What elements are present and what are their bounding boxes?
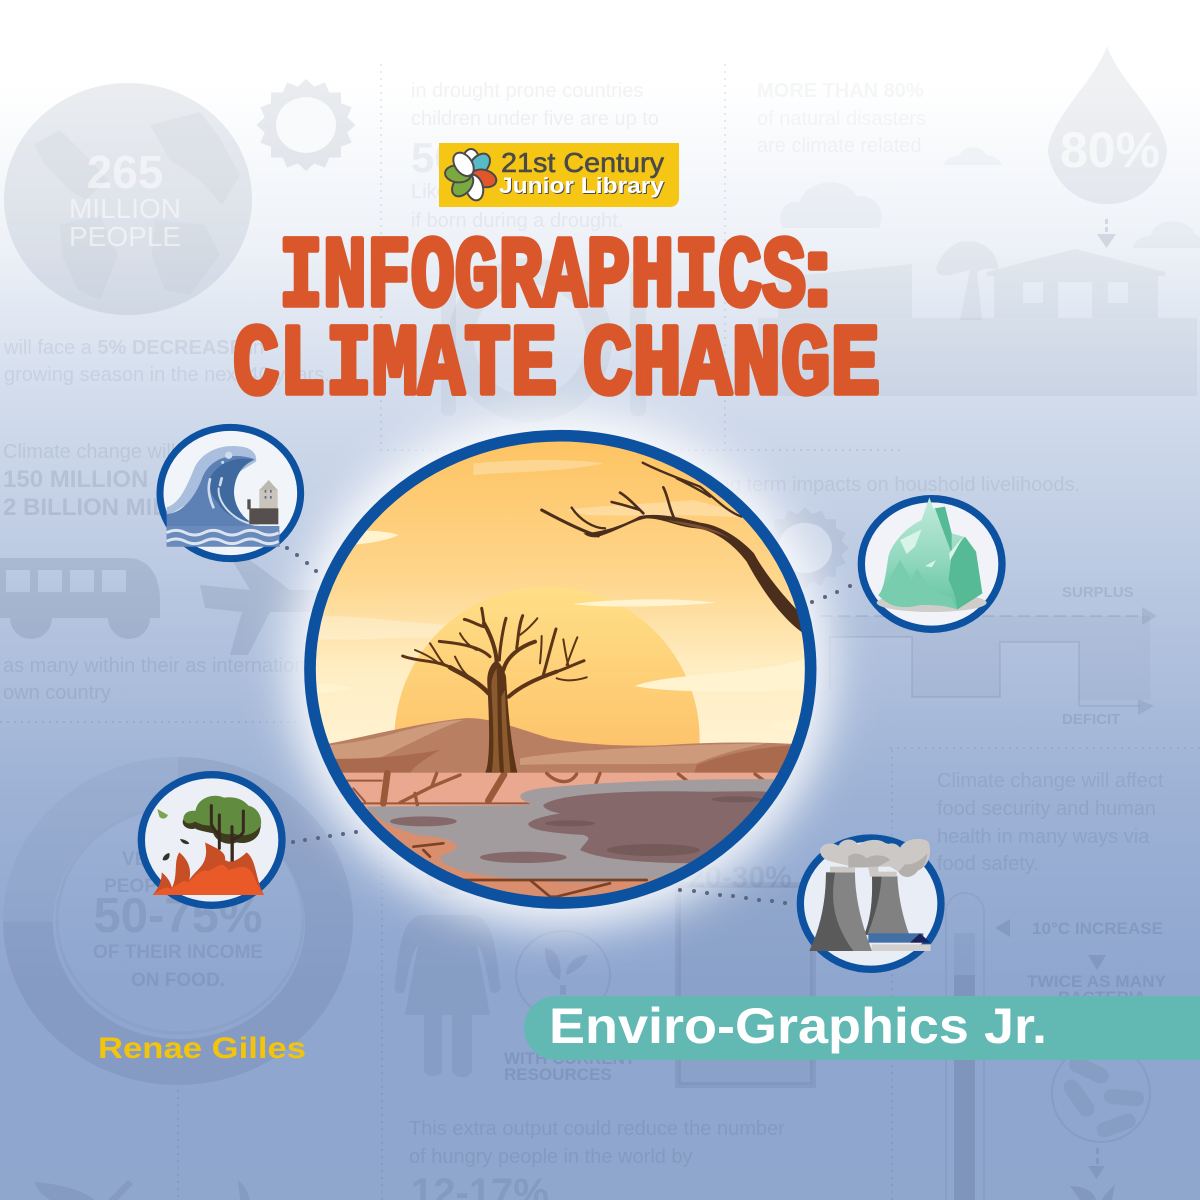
title line 1: : — [801, 215, 834, 327]
surplus deficit chart: DEFICIT — [1062, 711, 1120, 728]
wave inner shade — [208, 459, 254, 522]
globe: 265 million people: 265 — [87, 146, 163, 198]
dead tree — [403, 608, 587, 773]
iceberg facets — [900, 529, 963, 567]
food security text — [937, 770, 1164, 875]
icon: tsunami wave — [160, 427, 301, 559]
donut chart income on food: PEOPLE SPEND — [104, 876, 252, 897]
lower ground base — [367, 809, 660, 898]
icon: power plant — [800, 838, 941, 969]
big foreground branch — [542, 463, 807, 633]
sun icon — [257, 79, 355, 171]
blue ring — [310, 436, 811, 903]
iceberg shadow — [877, 593, 987, 612]
food security text: food security and human — [937, 798, 1156, 820]
dashed arrow from drop — [1097, 219, 1116, 248]
growing season text — [3, 337, 330, 386]
scene artwork — [310, 430, 810, 913]
darker mud pools — [545, 796, 762, 856]
tree canopy shadow — [183, 798, 261, 844]
iceberg circle frame — [861, 499, 1002, 629]
livelihoods text: long term impacts on houshold livelihoods. — [703, 474, 1080, 496]
resources label: WITH CURRENT — [504, 1049, 636, 1068]
logo text: 21st Century: 21st Century — [501, 147, 664, 178]
migration text: 150 MILLION — [3, 466, 148, 493]
migration text: Climate change will — [3, 441, 175, 463]
bottom leaves — [35, 1180, 250, 1200]
series banner — [524, 996, 1200, 1060]
cracked ground — [342, 772, 778, 810]
main drought scene — [310, 430, 811, 913]
author name: Renae Gilles — [98, 1032, 306, 1065]
drought text block: children under five are up to — [411, 108, 659, 130]
white glow behind scene — [288, 412, 832, 928]
migration caption: own country — [3, 682, 111, 704]
title line 1: INFOGRAPHICS — [279, 223, 806, 336]
temperature labels: TWICE AS MANY — [1027, 972, 1167, 991]
icon: iceberg — [861, 497, 1002, 629]
logo yellow plate — [439, 143, 679, 207]
thermometer — [946, 893, 984, 1200]
wave crest back — [167, 446, 256, 517]
growing season text: growing season in the next 40 years. — [4, 364, 330, 386]
publisher logo — [439, 143, 679, 207]
title line 2: CLIMATE — [233, 311, 557, 424]
lighter hill faces — [310, 720, 767, 765]
dark mud pools — [390, 791, 773, 863]
wave highlights — [209, 453, 257, 525]
natural disasters text block: of natural disasters — [757, 108, 926, 130]
water drop 80% — [1048, 46, 1167, 204]
title line 2 — [233, 311, 880, 424]
natural disasters text block — [757, 80, 926, 157]
icon: forest fire — [141, 775, 282, 905]
dashed arrow and sprout — [1070, 1148, 1115, 1200]
donut chart income on food: 50-75% — [94, 889, 262, 943]
flying leaves — [157, 809, 189, 860]
drought text block — [411, 80, 659, 232]
surplus deficit chart — [820, 584, 1157, 728]
drought text block: Likely to be malnourished — [411, 181, 638, 203]
logo flower — [444, 149, 498, 202]
wave circle frame — [160, 427, 301, 559]
donut chart income on food: OF THEIR INCOME — [93, 942, 263, 963]
smoke — [820, 839, 930, 877]
banner shape — [524, 996, 1200, 1060]
phone frame with 20-30%: 20-30% — [688, 861, 792, 894]
donut chart income on food: VERY POOR — [122, 849, 234, 870]
hunger text: This extra output could reduce the number — [409, 1118, 785, 1140]
tree canopy — [183, 796, 261, 835]
hunger text — [409, 1118, 785, 1200]
migration text: 2 BILLION MILES — [3, 494, 199, 521]
temperature labels — [995, 919, 1167, 1007]
water drop 80%: 80% — [1060, 122, 1160, 178]
resources label: RESOURCES — [504, 1065, 612, 1084]
natural disasters text block: are climate related — [757, 135, 922, 157]
globe: 265 million people — [4, 83, 252, 315]
wave body — [167, 456, 280, 547]
donut chart income on food: ON FOOD. — [131, 970, 225, 991]
resources label — [504, 1049, 636, 1084]
sky clouds front — [316, 530, 804, 691]
cooling tower back — [864, 876, 909, 935]
globe: 265 million people: PEOPLE — [69, 221, 181, 252]
plate and cutlery icon — [441, 258, 646, 422]
logo text shadow: Junior Library — [500, 174, 666, 199]
far hills — [329, 718, 792, 773]
growing season text: will face a 5% DECREASE in — [3, 337, 264, 359]
temperature labels: BACTERIA — [1058, 988, 1146, 1007]
clouds — [780, 148, 1200, 248]
iceberg lower facets — [878, 560, 957, 609]
back flames — [153, 842, 264, 895]
natural disasters text block: MORE THAN 80% — [757, 80, 924, 102]
sun icon 2 — [761, 507, 849, 589]
hunger text: of hungry people in the world by — [409, 1146, 693, 1168]
puddle of mud — [367, 779, 810, 883]
title — [233, 215, 880, 424]
globe: 265 million people: MILLION — [69, 193, 181, 224]
connector dots: wave — [285, 546, 318, 573]
food security text: Climate change will affect — [937, 770, 1164, 792]
seaside building — [247, 480, 278, 524]
drought text block: if born during a drought. — [411, 210, 623, 232]
title line 2: CHANGE — [583, 311, 880, 424]
sun disc — [394, 587, 700, 746]
migration text — [3, 441, 199, 521]
food security text: health in many ways via — [937, 826, 1150, 848]
migration caption — [3, 655, 321, 704]
front flames — [153, 865, 264, 895]
dark hill bands — [336, 746, 790, 772]
migration caption: as many within their as international — [3, 655, 321, 677]
water waves — [167, 526, 279, 547]
bacteria circle — [1052, 1044, 1150, 1142]
lower ground cracks — [413, 843, 647, 897]
connector dots: factory — [678, 888, 787, 905]
plane icon — [200, 560, 320, 655]
sky clouds back — [313, 460, 747, 640]
flooded houses and palm tree — [775, 241, 1165, 320]
blue building — [868, 933, 931, 951]
drought text block: in drought prone countries — [411, 80, 643, 102]
food security text: food safety. — [937, 853, 1039, 875]
tree trunks — [211, 806, 243, 863]
donut chart income on food — [3, 757, 353, 1085]
logo text: Junior Library: Junior Library — [499, 173, 665, 198]
iceberg right shade — [935, 507, 982, 609]
connector dots: fire — [291, 830, 358, 844]
surplus deficit chart: SURPLUS — [1062, 584, 1134, 601]
connector dots: iceberg — [810, 584, 852, 604]
ground cracks upper — [340, 773, 767, 805]
drought text block: 50% MORE — [411, 134, 633, 181]
power plant circle frame — [800, 838, 941, 969]
bus icon — [0, 558, 160, 639]
flood water band — [758, 318, 1197, 396]
fire circle frame — [141, 775, 282, 905]
woman figure — [394, 855, 501, 1077]
iceberg body — [878, 497, 982, 609]
phone frame with 20-30% — [678, 861, 813, 1085]
smoke shadows — [848, 853, 927, 877]
cooling tower front — [809, 872, 872, 951]
plant circle — [516, 931, 610, 1019]
sky — [316, 442, 804, 744]
temperature labels: 10°C INCREASE — [1032, 919, 1163, 938]
series name: Enviro-Graphics Jr. — [549, 998, 1047, 1054]
